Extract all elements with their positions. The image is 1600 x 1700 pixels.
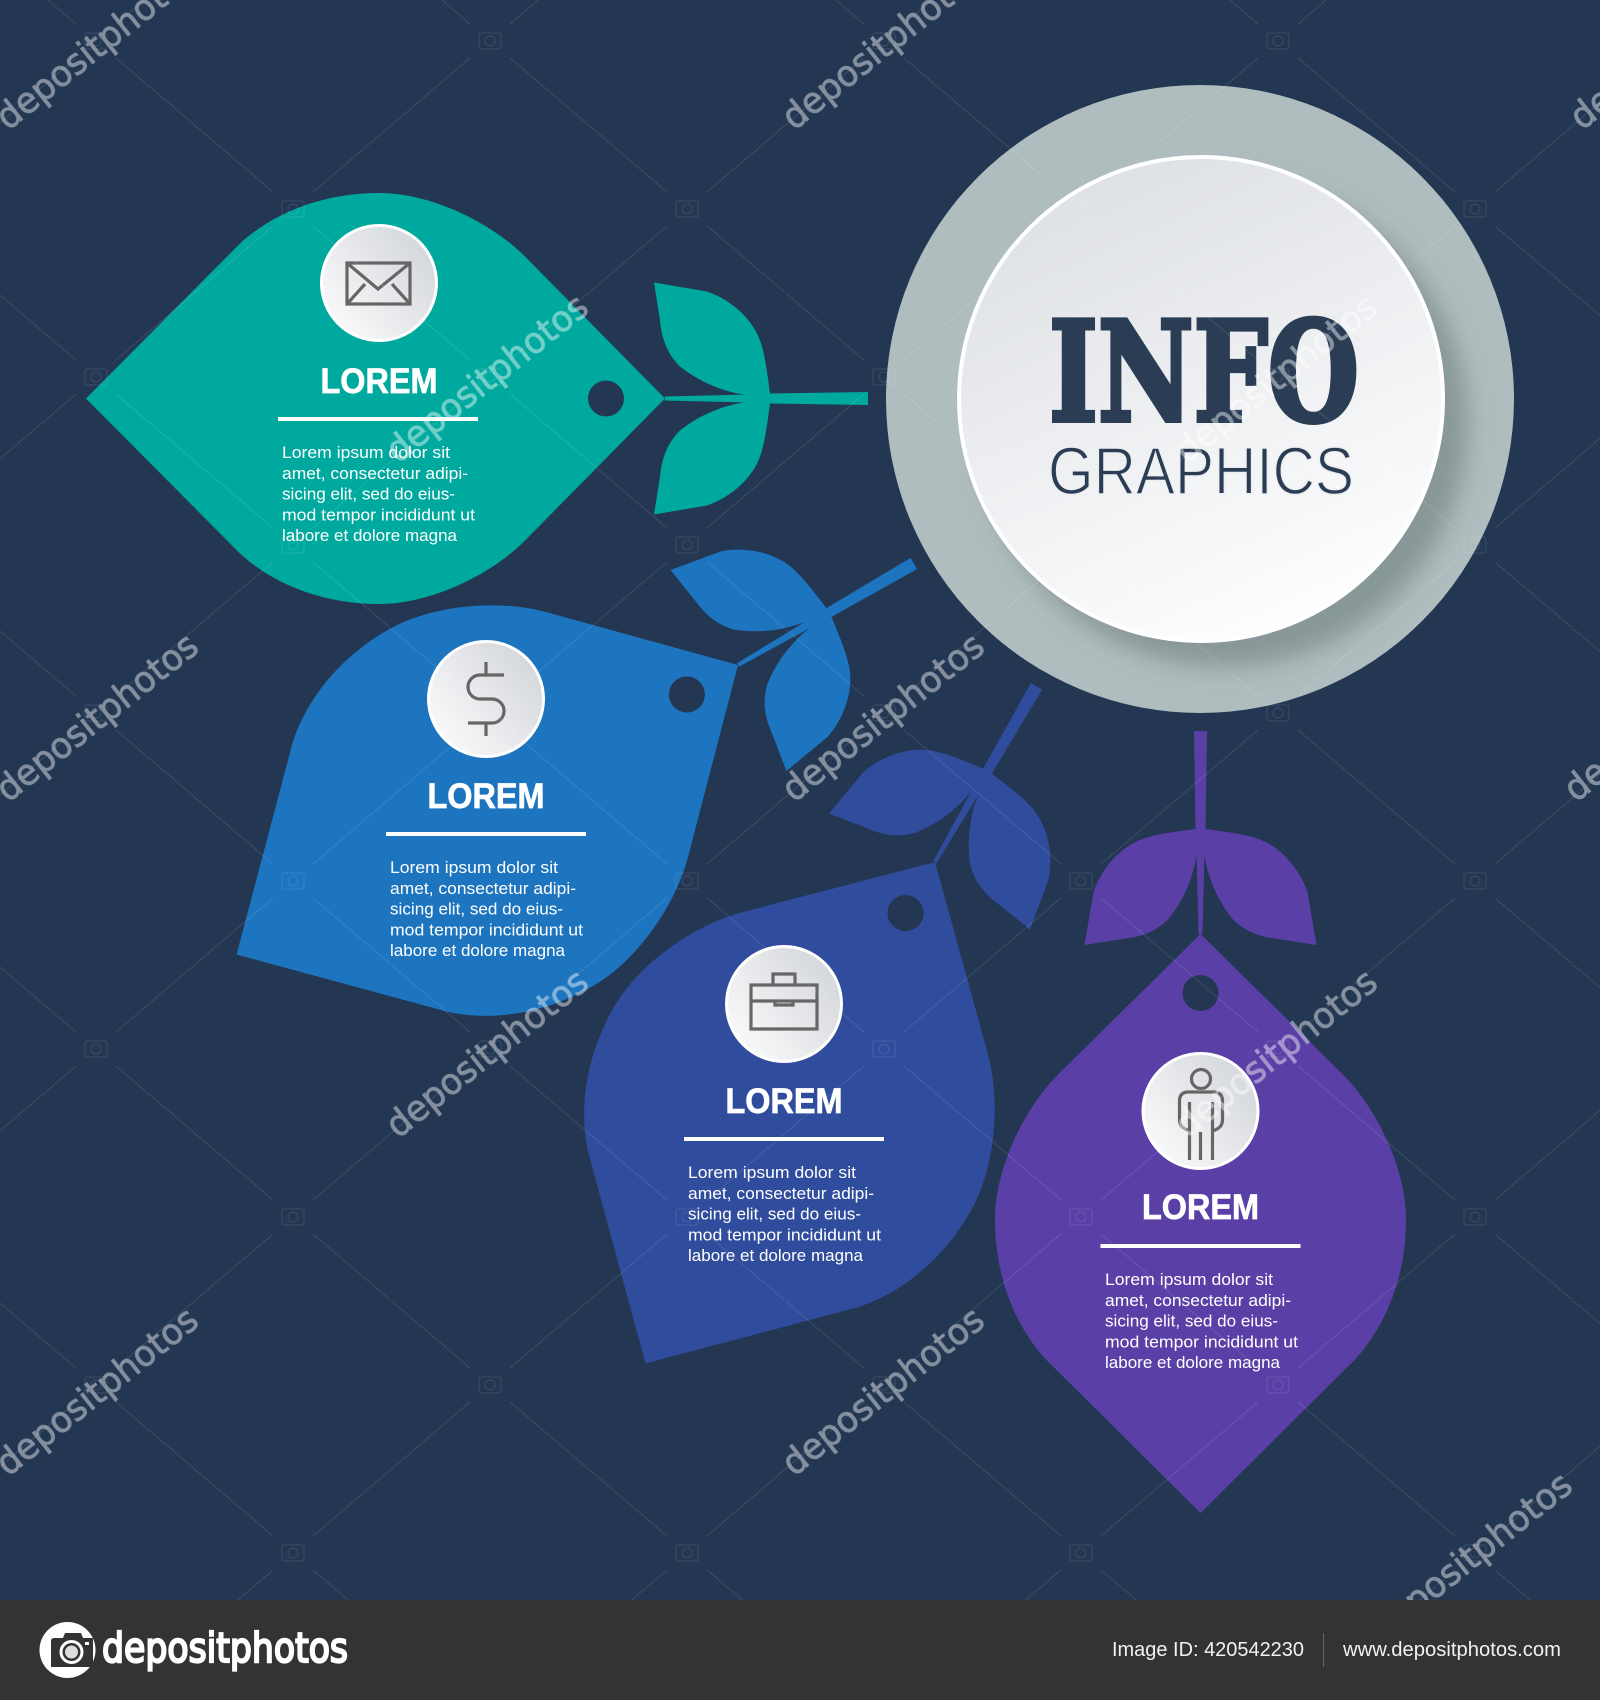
text block: sicing elit, sed do eius- <box>1105 1312 1278 1331</box>
text block: amet, consectetur adipi- <box>1105 1291 1291 1310</box>
text block: labore et dolore magna <box>688 1246 864 1265</box>
watermark text: depositphotos <box>1362 1464 1580 1649</box>
icon: envelope <box>322 226 436 340</box>
watermark text: depositphotos <box>1167 286 1385 471</box>
text block: mod tempor incididunt ut <box>1105 1332 1298 1351</box>
divider <box>1323 1633 1324 1667</box>
panel: central badge <box>886 85 1514 713</box>
text block: labore et dolore magna <box>390 941 566 960</box>
watermark text: depositphotos <box>1167 961 1385 1146</box>
website: www.depositphotos.com <box>1342 1639 1561 1661</box>
rule <box>684 1137 884 1141</box>
watermark text: depositphotos <box>378 961 596 1146</box>
leaf shape and sprig: purple <box>995 731 1406 1513</box>
text block: labore et dolore magna <box>1105 1353 1281 1372</box>
panel: indigo leaf <box>468 583 1214 1466</box>
icon: dollar <box>428 642 544 756</box>
text block: amet, consectetur adipi- <box>282 464 468 483</box>
rule <box>278 417 478 421</box>
heading: LOREM <box>320 362 438 401</box>
leaf shape and sprig: blue <box>134 386 1017 1132</box>
text block: amet, consectetur adipi- <box>688 1184 874 1203</box>
text block: mod tempor incididunt ut <box>282 505 475 524</box>
text block: Lorem ipsum dolor sit <box>390 858 558 877</box>
icon: person <box>1143 1054 1258 1168</box>
watermark text: depositphotos <box>774 1299 992 1484</box>
text block: Lorem ipsum dolor sit <box>1105 1270 1273 1289</box>
text block: Lorem ipsum dolor sit <box>688 1163 856 1182</box>
leaf shape and sprig: teal <box>86 193 868 604</box>
text block: amet, consectetur adipi- <box>390 879 576 898</box>
watermark text: depositphotos <box>378 286 596 471</box>
heading: LOREM <box>1142 1188 1259 1227</box>
title: INFO: INFO <box>1049 290 1359 454</box>
panel: teal leaf <box>86 193 868 604</box>
footer bar <box>0 1600 1600 1700</box>
panel: purple leaf <box>995 731 1406 1513</box>
text block: sicing elit, sed do eius- <box>390 900 563 919</box>
text block: mod tempor incididunt ut <box>688 1225 881 1244</box>
logo wordmark: depositphotos <box>102 1624 348 1672</box>
watermark text: depositphotos <box>774 625 992 810</box>
image id: Image ID: 420542230 <box>1112 1639 1304 1661</box>
text block: Lorem ipsum dolor sit <box>282 443 450 462</box>
heading: LOREM <box>428 777 544 816</box>
text block: sicing elit, sed do eius- <box>688 1205 861 1224</box>
icon: logo camera <box>40 1622 96 1678</box>
text block: sicing elit, sed do eius- <box>282 485 455 504</box>
rule <box>386 832 586 836</box>
icon: briefcase <box>726 946 842 1062</box>
leaf shape and sprig: indigo <box>468 583 1214 1466</box>
text block: mod tempor incididunt ut <box>390 920 583 939</box>
text block: labore et dolore magna <box>282 526 458 545</box>
heading: LOREM <box>726 1082 842 1121</box>
rule <box>1100 1244 1300 1248</box>
panel: blue leaf <box>134 386 1017 1132</box>
title: GRAPHICS: GRAPHICS <box>1048 434 1354 509</box>
